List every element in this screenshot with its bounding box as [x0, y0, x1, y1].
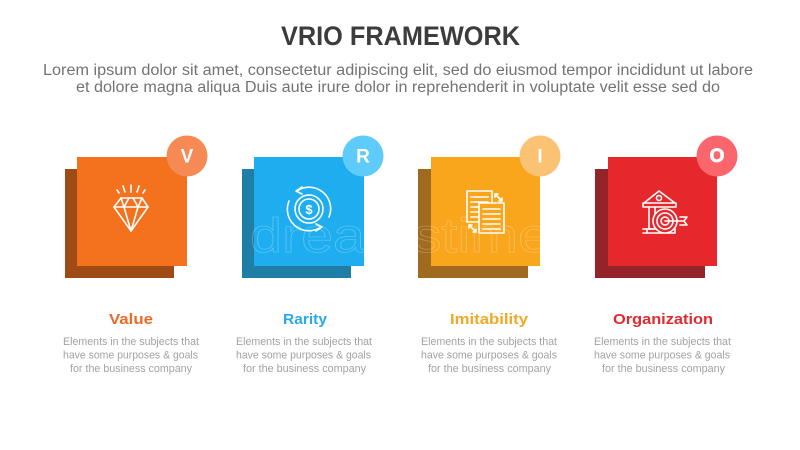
panel: rarity — [242, 136, 384, 278]
organization badge: O — [710, 146, 724, 167]
text block: organization: Elements in the subjects that — [594, 336, 731, 348]
rarity square — [254, 157, 364, 266]
text block: rarity: for the business company — [243, 363, 366, 375]
text block: value: Value — [109, 311, 153, 328]
value badge — [166, 136, 208, 176]
text block: rarity: Elements in the subjects that — [236, 336, 372, 348]
icon: diamond — [114, 185, 148, 231]
icon: dollar cycle: $ — [305, 202, 313, 217]
title: VRIO FRAMEWORK — [281, 21, 520, 51]
imitability badge: I — [537, 146, 543, 168]
panel: imitability — [418, 136, 560, 278]
text block: organization: Organization — [613, 311, 713, 328]
value badge: V — [181, 146, 194, 168]
text block: imitability: for the business company — [428, 363, 551, 375]
icon: bank and target — [643, 191, 687, 233]
text block: rarity — [236, 311, 372, 375]
text block: organization — [594, 311, 731, 375]
text block: imitability — [421, 311, 557, 375]
panel: organization — [595, 136, 738, 278]
text block: imitability: Imitability — [450, 311, 529, 328]
text block: imitability: Elements in the subjects that — [421, 336, 557, 348]
subtitle text: Lorem ipsum dolor sit amet, consectetur adipiscing elit, sed do eiusmod tempor incididunt ut labore — [43, 62, 753, 79]
watermark: dreamstime — [250, 210, 550, 263]
organization badge — [696, 136, 738, 176]
text block: organization: for the business company — [602, 363, 725, 375]
text block: value: Elements in the subjects that — [63, 336, 199, 348]
value shadow square — [65, 169, 174, 278]
text block: imitability: have some purposes & goals — [421, 350, 557, 362]
text block: rarity: have some purposes & goals — [236, 350, 371, 362]
text block: value: for the business company — [70, 363, 192, 375]
rarity badge: R — [356, 146, 370, 168]
organization shadow square — [595, 169, 705, 278]
value square — [77, 157, 187, 266]
imitability shadow square — [418, 169, 528, 278]
imitability square — [431, 157, 540, 266]
text block: organization: have some purposes & goals — [594, 350, 730, 362]
imitability badge — [520, 136, 560, 176]
icon: documents — [467, 191, 504, 233]
rarity shadow square — [242, 169, 351, 278]
rarity badge — [342, 136, 384, 176]
text block: value: have some purposes & goals — [63, 350, 198, 362]
text block: rarity: Rarity — [283, 311, 328, 328]
panel: value — [65, 136, 208, 278]
subtitle text — [43, 62, 753, 96]
text block: value — [63, 311, 199, 375]
organization square — [608, 157, 717, 266]
icon: dollar cycle — [287, 187, 331, 231]
subtitle text: et dolore magna aliqua Duis aute irure dolor in reprehenderit in voluptate velit esse sed do — [76, 79, 720, 96]
